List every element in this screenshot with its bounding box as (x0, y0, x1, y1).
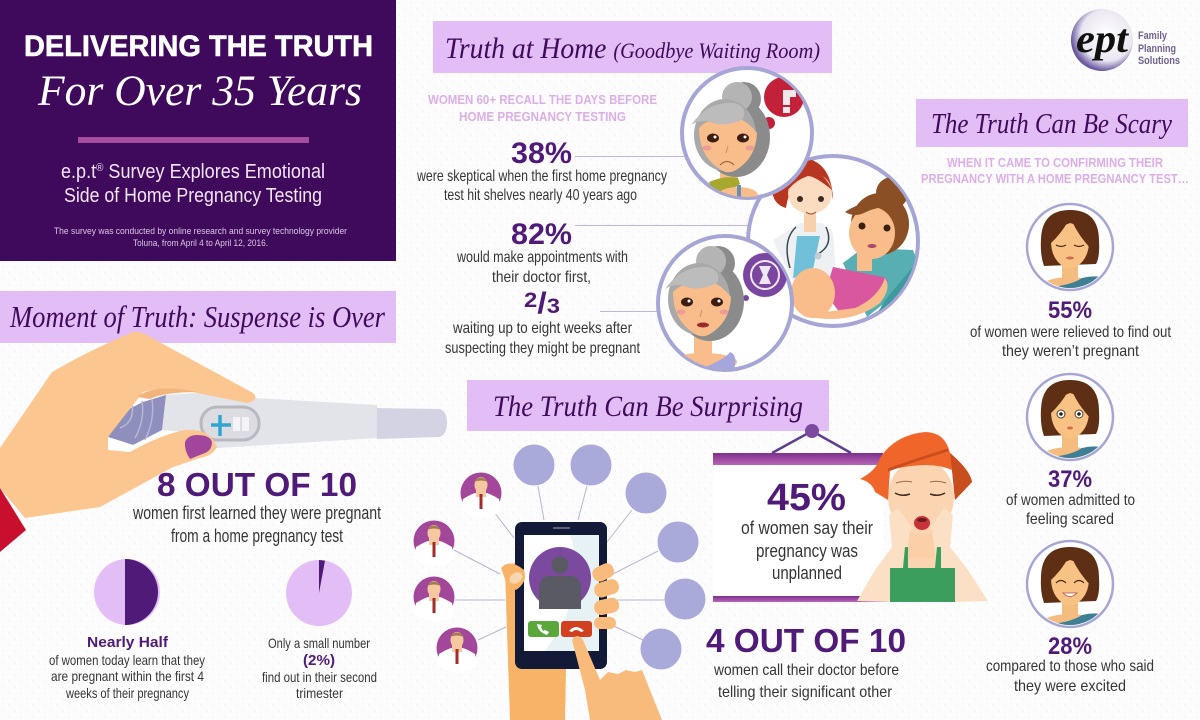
patient (843, 248, 917, 317)
illustration: waiting older woman (658, 236, 792, 371)
pie chart: nearly half (94, 559, 160, 625)
stat: 55%: 55% (1048, 297, 1092, 324)
panel: header (0, 0, 396, 261)
text: women 60+ subheading: WOMEN 60+ RECALL THE DAYS BEFORE (428, 92, 657, 107)
stat: 8 out of 10: 8 OUT OF 10 (157, 466, 357, 503)
panel: truth at home heading (433, 21, 832, 73)
logo: ept (1071, 9, 1180, 71)
text: small number: trimester (296, 685, 343, 701)
stat: two thirds: suspecting they might be pregnant (445, 340, 640, 357)
illustration: doctor with pregnant patient (748, 156, 918, 326)
text: women 60+ subheading: HOME PREGNANCY TESTING (459, 109, 626, 124)
stat: 28% (986, 633, 1154, 695)
stat: 45%: 45% (767, 477, 846, 519)
text: nearly half: Nearly Half (87, 634, 169, 651)
survey heading: Side of Home Pregnancy Testing (64, 185, 322, 207)
portrait: scared (1026, 372, 1114, 462)
text: small number: (2%) (303, 652, 335, 669)
stat: 8 out of 10: from a home pregnancy test (171, 526, 343, 546)
stat: 4 out of 10: telling their significant other (718, 684, 893, 701)
stat: 38% (416, 137, 667, 204)
stat: 28%: 28% (1048, 633, 1092, 660)
text: nearly half: are pregnant within the first 4 (51, 668, 204, 684)
text: confirming pregnancy subheading (921, 155, 1189, 186)
stat: 4 out of 10: 4 OUT OF 10 (706, 622, 906, 659)
stat: two thirds: 2 (524, 289, 537, 312)
panel: truth can be surprising heading (467, 380, 829, 431)
logo: ept: ept (1076, 16, 1130, 61)
illustration: surprised woman (857, 432, 988, 602)
stat: 37%: feeling scared (1026, 511, 1114, 528)
shirt cuff (0, 488, 26, 552)
stat: 8 out of 10 (132, 466, 381, 546)
panel: moment of truth heading: Moment of Truth: Suspense is Over (9, 299, 386, 334)
text: confirming pregnancy subheading: WHEN IT CAME TO CONFIRMING THEIR (947, 155, 1164, 170)
panel: truth can be surprising heading: The Truth Can Be Surprising (493, 390, 803, 423)
panel: truth at home heading: Truth at Home (Goodbye Waiting Room) (445, 32, 820, 65)
title: DELIVERING THE TRUTH (24, 30, 373, 63)
stat: two thirds (445, 287, 640, 357)
stat: 45%: of women say their (741, 518, 873, 538)
stat: 4 out of 10: women call their doctor before (713, 662, 899, 679)
text: small number: find out in their second (262, 669, 377, 685)
stat: 28%: compared to those who said (986, 658, 1154, 675)
stat: 8 out of 10: women first learned they were pregnant (132, 503, 381, 523)
stat: 45%: pregnancy was (756, 541, 858, 561)
survey note: Toluna, from April 4 to April 12, 2016. (133, 238, 268, 249)
stat: 55% (970, 297, 1171, 360)
stat: 45% (741, 477, 873, 583)
doctor (773, 223, 836, 282)
illustration: hand holding pregnancy test (0, 332, 447, 552)
stat: 82%: 82% (511, 218, 572, 251)
text: nearly half: of women today learn that they (49, 652, 205, 668)
stat: 82% (456, 218, 628, 286)
survey heading: ® (96, 162, 103, 174)
stat: 82%: their doctor first, (492, 269, 591, 286)
stat: 38%: were skeptical when the first home pregnancy (416, 168, 667, 185)
stat: two thirds: waiting up to eight weeks after (452, 320, 633, 337)
portrait: relieved (1026, 202, 1114, 292)
stat: two thirds: 3 (547, 295, 560, 318)
panel: moment of truth heading (0, 291, 396, 343)
text: small number: Only a small number (268, 635, 370, 651)
stat: 37%: of women admitted to (1006, 492, 1135, 509)
subtitle script: For Over 35 Years (37, 68, 362, 115)
logo: ept: Solutions (1138, 55, 1180, 67)
text: small number (262, 635, 377, 701)
stat: two thirds: / (537, 287, 547, 320)
stat: 37%: 37% (1048, 466, 1092, 493)
icons: lavender contacts (514, 444, 706, 670)
survey heading: e.p.t (61, 161, 100, 183)
portrait: excited (1026, 540, 1114, 628)
pie chart: small number (286, 560, 352, 626)
survey note (54, 226, 347, 249)
logo: ept: Family (1138, 30, 1168, 42)
stat: 55%: they weren’t pregnant (1002, 343, 1139, 360)
text: nearly half (49, 634, 205, 701)
stat: 45%: unplanned (772, 563, 842, 583)
illustration: hands holding phone (501, 522, 662, 720)
survey heading (61, 161, 325, 207)
diagram: connections around phone (454, 486, 665, 640)
icons: doctors (414, 472, 502, 673)
survey heading: Survey Explores Emotional (103, 161, 325, 183)
panel: truth can be scary heading (916, 99, 1188, 147)
stat: 82%: would make appointments with (456, 249, 628, 266)
text: women 60+ subheading (428, 92, 657, 124)
text: nearly half: weeks of their pregnancy (65, 685, 189, 701)
stat: 4 out of 10 (706, 622, 906, 701)
poster: 45% unplanned (713, 424, 893, 602)
stat: 28%: they were excited (1014, 678, 1126, 695)
stat: 37% (1006, 466, 1135, 528)
illustration: skeptical older woman (682, 68, 812, 203)
survey note: The survey was conducted by online research and survey technology provider (54, 226, 347, 237)
stat: 38%: test hit shelves nearly 40 years ago (444, 187, 637, 204)
stat: 38%: 38% (511, 137, 572, 170)
logo: ept: Planning (1138, 43, 1176, 55)
